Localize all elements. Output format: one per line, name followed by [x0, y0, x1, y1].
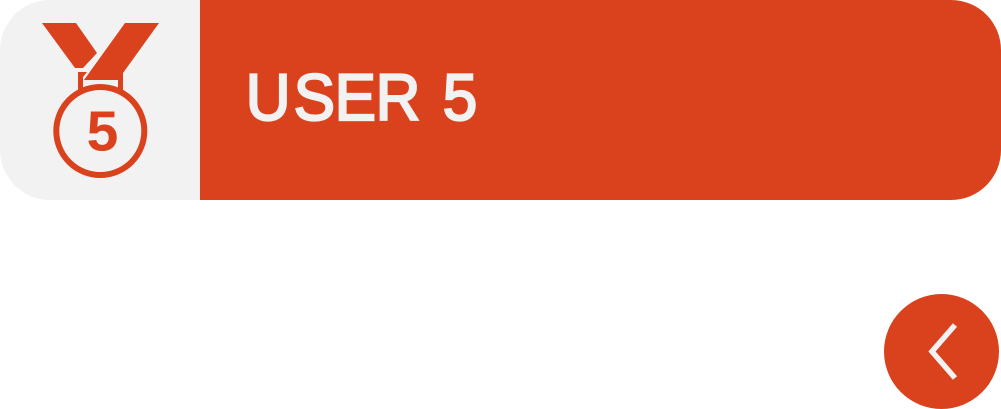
icon panel grey background [0, 0, 200, 200]
banner orange background [190, 0, 1001, 200]
medal number: 5 [87, 100, 118, 164]
icon: left chevron arrow [932, 325, 955, 378]
button circle [884, 294, 999, 409]
icon: medal with number 5 [42, 23, 159, 175]
heading: USER 5 [246, 60, 477, 134]
medal left strap [78, 72, 87, 90]
medal ring [56, 87, 144, 175]
banner panel [0, 0, 1001, 200]
medal left ribbon [42, 23, 97, 68]
back button [884, 294, 999, 409]
medal right ribbon and strap [84, 23, 159, 90]
